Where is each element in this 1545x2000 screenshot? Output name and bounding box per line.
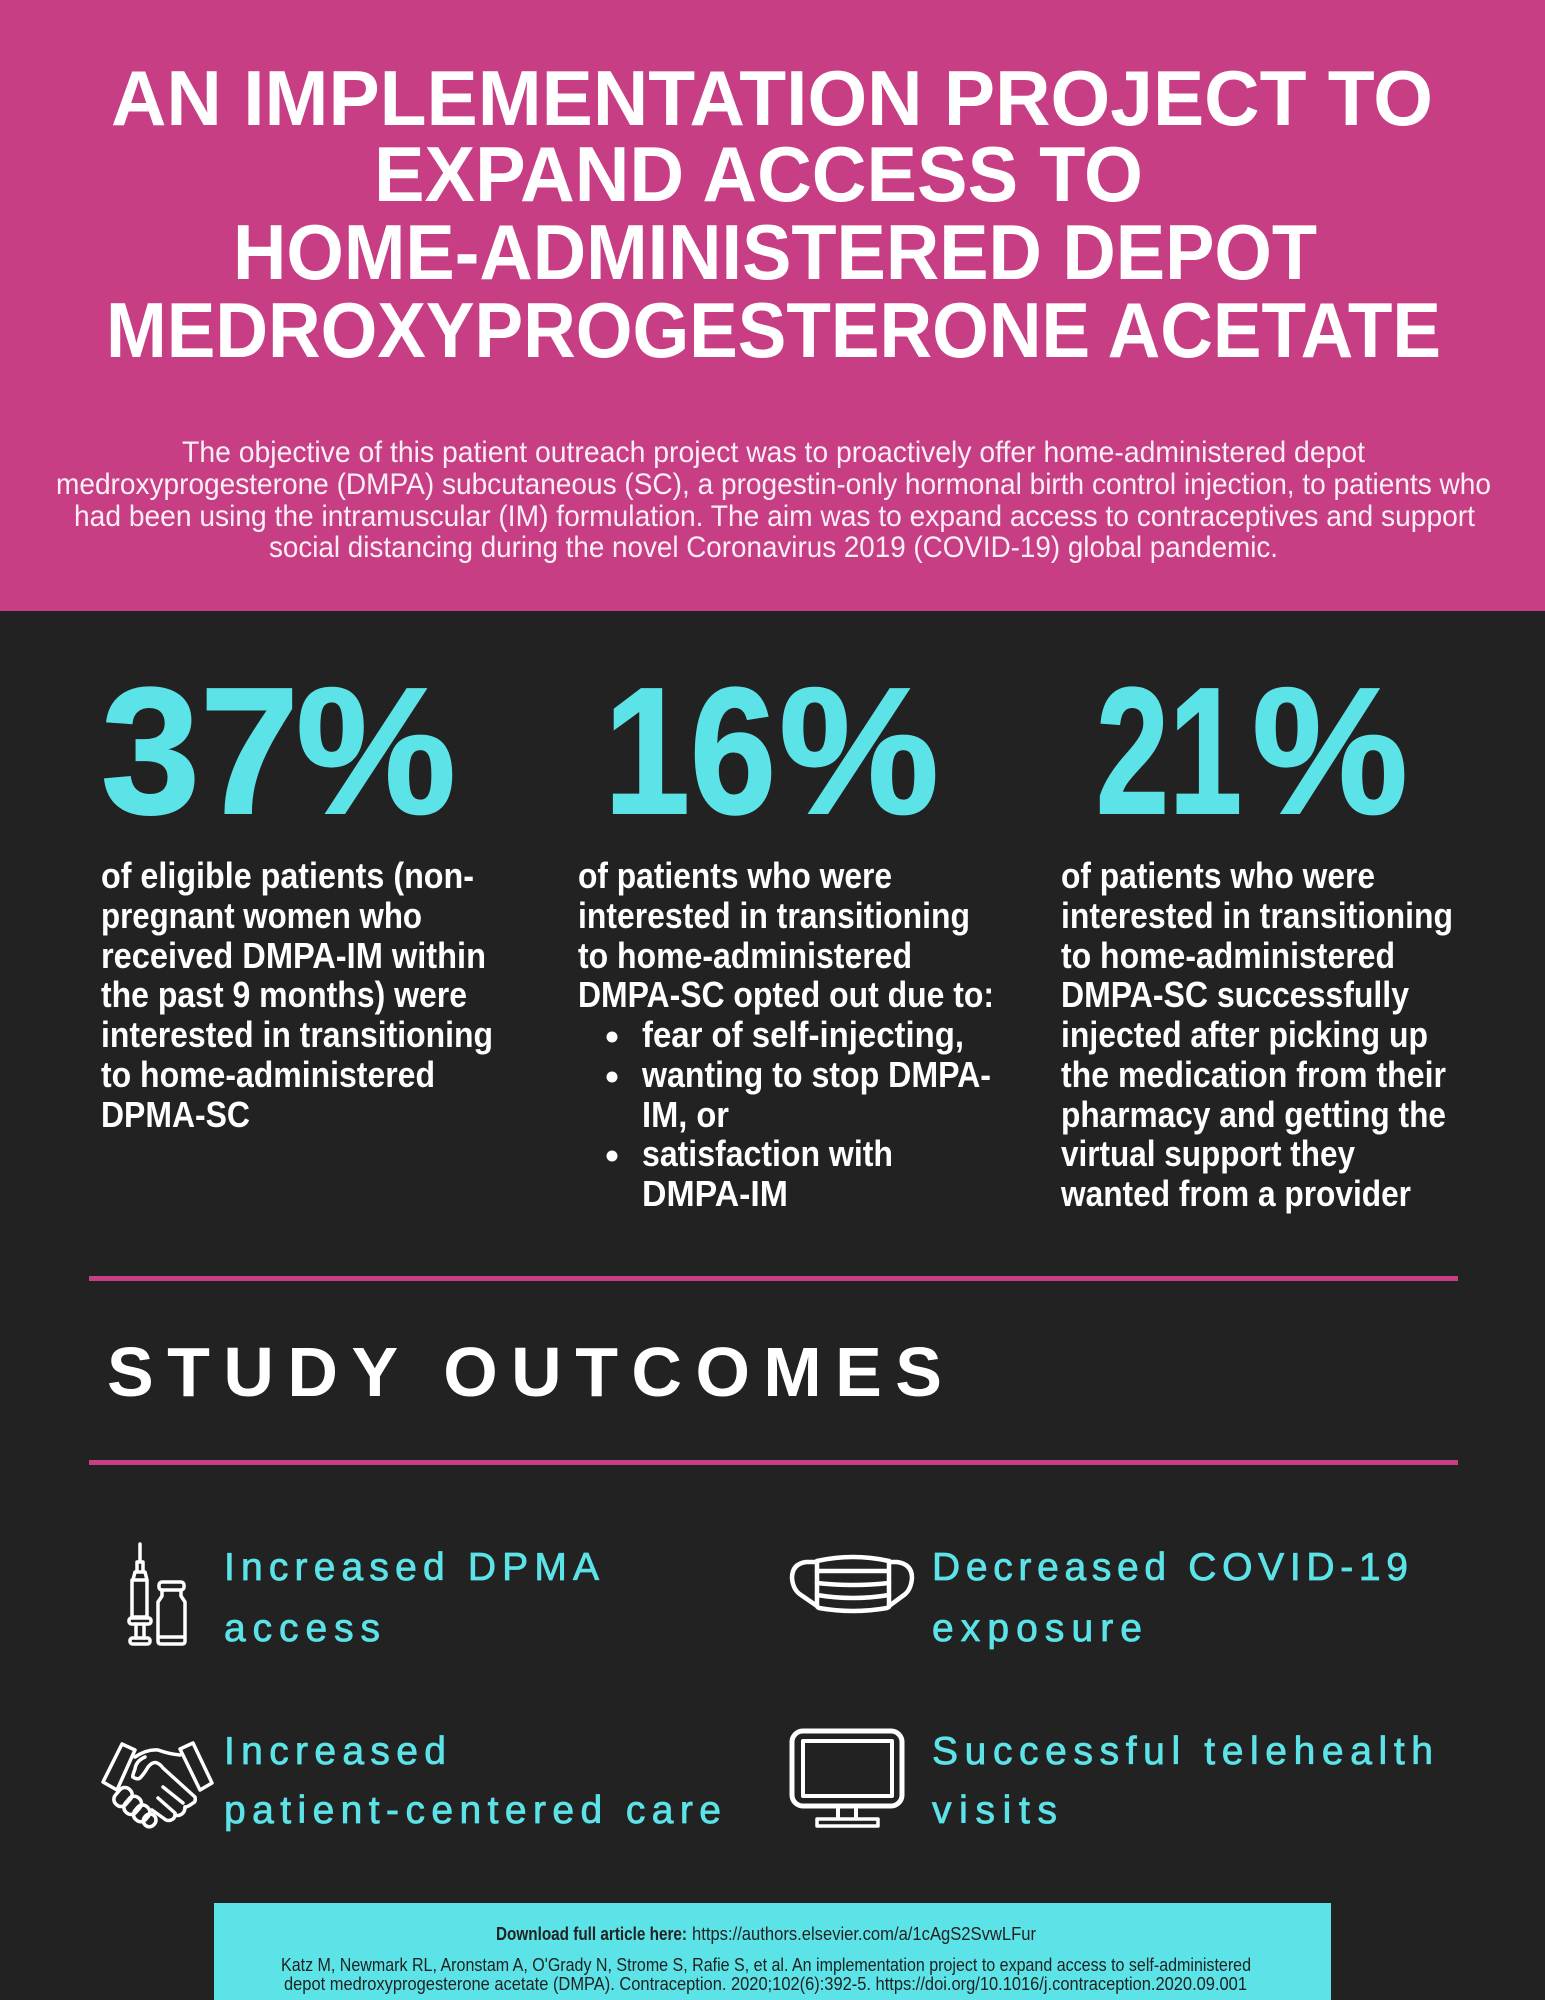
stat description 37%: of eligible patients (non- <box>101 855 474 896</box>
title <box>106 54 1441 374</box>
stat description 16%: DMPA-SC opted out due to: <box>578 974 994 1015</box>
panel: statistic 16% <box>578 651 994 1214</box>
outcome: increased DPMA access <box>129 1544 599 1650</box>
stat description 37%: DPMA-SC <box>101 1094 250 1135</box>
stat number 16%: 16 <box>604 651 776 852</box>
stat number 21% <box>1096 651 1408 852</box>
stat number 16%: % <box>779 651 939 852</box>
outcome text: decreased COVID-19 exposure: exposure <box>932 1607 1142 1650</box>
stat number 21%: % <box>1252 651 1408 852</box>
stat description 16%: to home-administered <box>578 935 912 976</box>
outcome: increased patient-centered care <box>103 1730 721 1832</box>
stat description 37%: received DMPA-IM within <box>101 935 486 976</box>
panel: statistic 37% <box>101 651 493 1135</box>
stat description 16%: DMPA-IM <box>642 1173 788 1214</box>
outcome text: increased DPMA access: access <box>224 1607 380 1650</box>
stat description 21%: injected after picking up <box>1061 1014 1428 1055</box>
panel: citation footer <box>214 1903 1331 2000</box>
download link line: https://authors.elsevier.com/a/1cAgS2SvwLFur <box>692 1924 1036 1944</box>
outcome text: increased DPMA access <box>224 1546 599 1650</box>
stat number 37%: % <box>296 651 456 852</box>
stat description 21%: the medication from their <box>1061 1054 1446 1095</box>
stat number 16% <box>604 651 939 852</box>
title: EXPAND ACCESS TO <box>374 130 1143 218</box>
stat description 16%: of patients who were <box>578 855 892 896</box>
objective paragraph: social distancing during the novel Coronavirus 2019 (COVID-19) global pandemic. <box>269 531 1278 564</box>
icon: face mask <box>792 1557 912 1611</box>
download link line: Download full article here: <box>496 1924 687 1944</box>
stat description 37% <box>101 855 493 1135</box>
outcome text: successful telehealth visits <box>932 1730 1433 1832</box>
icon: syringe and vial <box>129 1544 185 1644</box>
stat description 37%: interested in transitioning <box>101 1014 493 1055</box>
title: MEDROXYPROGESTERONE ACETATE <box>106 286 1441 374</box>
title: AN IMPLEMENTATION PROJECT TO <box>111 54 1433 142</box>
stat description 16%: interested in transitioning <box>578 895 970 936</box>
stat number 37%: 37 <box>101 651 299 852</box>
panel: header <box>0 0 1545 611</box>
stat description 16% <box>578 855 994 1214</box>
stat description 21% <box>1060 855 1453 1214</box>
outcome: successful telehealth visits <box>792 1730 1433 1832</box>
stat description 21%: to home-administered <box>1061 935 1395 976</box>
stat description 16%: IM, or <box>642 1094 729 1135</box>
stat description 16%: wanting to stop DMPA- <box>641 1054 991 1095</box>
outcome: decreased COVID-19 exposure <box>792 1546 1408 1650</box>
stat description 21%: interested in transitioning <box>1061 895 1453 936</box>
stat description 16%: satisfaction with <box>642 1133 893 1174</box>
objective paragraph: had been using the intramuscular (IM) formulation. The aim was to expand access to contraceptives and support <box>74 500 1476 533</box>
outcome text: increased patient-centered care <box>224 1730 721 1832</box>
objective paragraph: The objective of this patient outreach project was to proactively offer home-administered depot <box>182 436 1366 469</box>
outcome text: increased DPMA access: Increased DPMA <box>224 1546 599 1589</box>
icon: computer monitor <box>792 1731 902 1826</box>
outcome text: decreased COVID-19 exposure <box>932 1546 1408 1650</box>
stat description 16%: fear of self-injecting, <box>642 1014 964 1055</box>
citation <box>281 1955 1251 1994</box>
stat number 21%: 21 <box>1096 651 1242 852</box>
objective paragraph <box>56 436 1491 564</box>
outcome text: increased patient-centered care: Increased <box>224 1730 446 1773</box>
citation: depot medroxyprogesterone acetate (DMPA). Contraception. 2020;102(6):392-5. https://doi.org/10.1016/j.contraception.2020.09.001 <box>284 1974 1247 1994</box>
heading: study outcomes: STUDY OUTCOMES <box>107 1333 942 1411</box>
outcome text: decreased COVID-19 exposure: Decreased COVID-19 <box>932 1546 1408 1589</box>
stat description 21%: virtual support they <box>1061 1133 1355 1174</box>
stat number 37% <box>101 651 456 852</box>
download link line <box>496 1924 1036 1944</box>
stat description 21%: DMPA-SC successfully <box>1061 974 1409 1015</box>
outcome text: successful telehealth visits: visits <box>932 1789 1057 1832</box>
outcome text: increased patient-centered care: patient-centered care <box>224 1789 721 1832</box>
icon: handshake <box>103 1743 212 1829</box>
stat description 21%: wanted from a provider <box>1060 1173 1411 1214</box>
stat description 37%: pregnant women who <box>101 895 422 936</box>
stat description 37%: the past 9 months) were <box>101 974 467 1015</box>
stat description 21%: of patients who were <box>1061 855 1375 896</box>
citation: Katz M, Newmark RL, Aronstam A, O'Grady N, Strome S, Rafie S, et al. An implementation project to expand access to self-administered <box>281 1955 1251 1975</box>
panel: statistic 21% <box>1060 651 1453 1214</box>
stat description 21%: pharmacy and getting the <box>1061 1094 1446 1135</box>
outcome text: successful telehealth visits: Successful telehealth <box>932 1730 1433 1773</box>
stat description 37%: to home-administered <box>101 1054 435 1095</box>
title: HOME-ADMINISTERED DEPOT <box>233 208 1317 296</box>
